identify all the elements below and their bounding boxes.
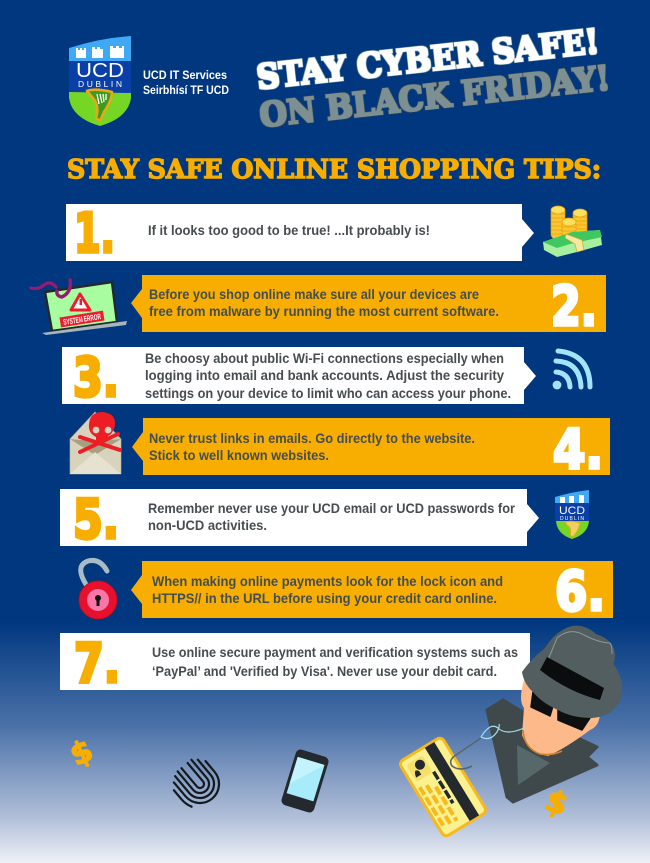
hat band [540, 657, 604, 700]
icon: small UCD logo [555, 490, 589, 539]
panel: tip 3: logging into email and bank accounts. Adjust the security [145, 367, 504, 383]
fishing line [481, 724, 524, 739]
credit card [399, 736, 487, 838]
header text: UCD IT Services [143, 68, 229, 97]
tip 5 text: Remember never use your UCD email or UCD passwords for [148, 500, 515, 516]
UCD logo: UCD [76, 60, 124, 82]
icon: open padlock [79, 560, 117, 619]
sunglasses [531, 692, 590, 730]
number 5: 5. [73, 488, 119, 551]
panel: tip 5: non-UCD activities. [148, 517, 267, 533]
panel: tip 5 [60, 488, 539, 551]
tip 6 text: When making online payments look for the lock icon and [152, 573, 503, 589]
icon: coins and cash [543, 206, 602, 257]
icon: dollar sign left: $ [65, 733, 98, 774]
heading: tips: STAY SAFE ONLINE SHOPPING TIPS: [67, 155, 601, 185]
hat [522, 626, 622, 718]
tip 1 text: If it looks too good to be true! ...It probably is! [148, 222, 430, 238]
chin line [523, 730, 562, 755]
hook [456, 738, 481, 755]
icon: laptop system error [31, 280, 127, 335]
icon: small UCD logo: DUBLIN [560, 516, 584, 522]
tip 4 text: Never trust links in emails. Go directly to the website. [149, 430, 475, 446]
panel: tip 6 [131, 560, 613, 623]
icon: laptop system error: SYSTEM ERROR [63, 312, 102, 327]
icon: dollar sign right: $ [541, 783, 572, 823]
header text: UCD IT Services: Seirbhísí TF UCD [143, 83, 229, 97]
UCD logo: DUBLIN [78, 79, 122, 89]
tip 7 text: Use online secure payment and verification systems such as [152, 644, 518, 660]
title: STAY CYBER SAFE! [255, 22, 601, 98]
number 6: 6. [555, 560, 605, 623]
panel: tip 7: ‘PayPal’ and 'Verified by Visa'. Never use your debit card. [152, 663, 497, 679]
panel: tip 3 [62, 346, 536, 409]
icon: email with skull [70, 412, 121, 474]
panel: tip 3: settings on your device to limit who can access your phone. [145, 385, 511, 401]
header text: UCD IT Services: UCD IT Services [143, 68, 227, 82]
number 3: 3. [73, 346, 119, 409]
tip 3 text: Be choosy about public Wi-Fi connections especially when [145, 350, 504, 366]
icon: spy with hook and credit card [399, 626, 622, 838]
number 2: 2. [551, 275, 597, 338]
icon: wifi [553, 351, 590, 389]
spy coat [487, 700, 597, 802]
UCD logo [69, 36, 131, 126]
tip 2 text: Before you shop online make sure all your devices are [149, 286, 479, 302]
panel: tip 2: free from malware by running the most current software. [149, 303, 499, 319]
spy shirt [517, 745, 550, 785]
icon: smartphone [280, 748, 330, 814]
number 7: 7. [74, 632, 120, 695]
title [255, 22, 612, 136]
icon: small UCD logo: UCD [559, 505, 585, 517]
number 1: 1. [74, 202, 115, 265]
number 4: 4. [553, 418, 603, 481]
title: ON BLACK FRIDAY! [258, 58, 612, 136]
spy face [521, 680, 600, 756]
icon: fingerprint [166, 753, 227, 814]
panel: tip 2 [131, 275, 606, 338]
panel: tip 7 [60, 632, 530, 695]
panel: tip 4 [132, 418, 610, 481]
panel: tip 1 [66, 202, 534, 265]
panel: tip 6: HTTPS// in the URL before using your credit card online. [152, 590, 497, 606]
hook end [451, 755, 472, 769]
panel: tip 4: Stick to well known websites. [149, 447, 329, 463]
